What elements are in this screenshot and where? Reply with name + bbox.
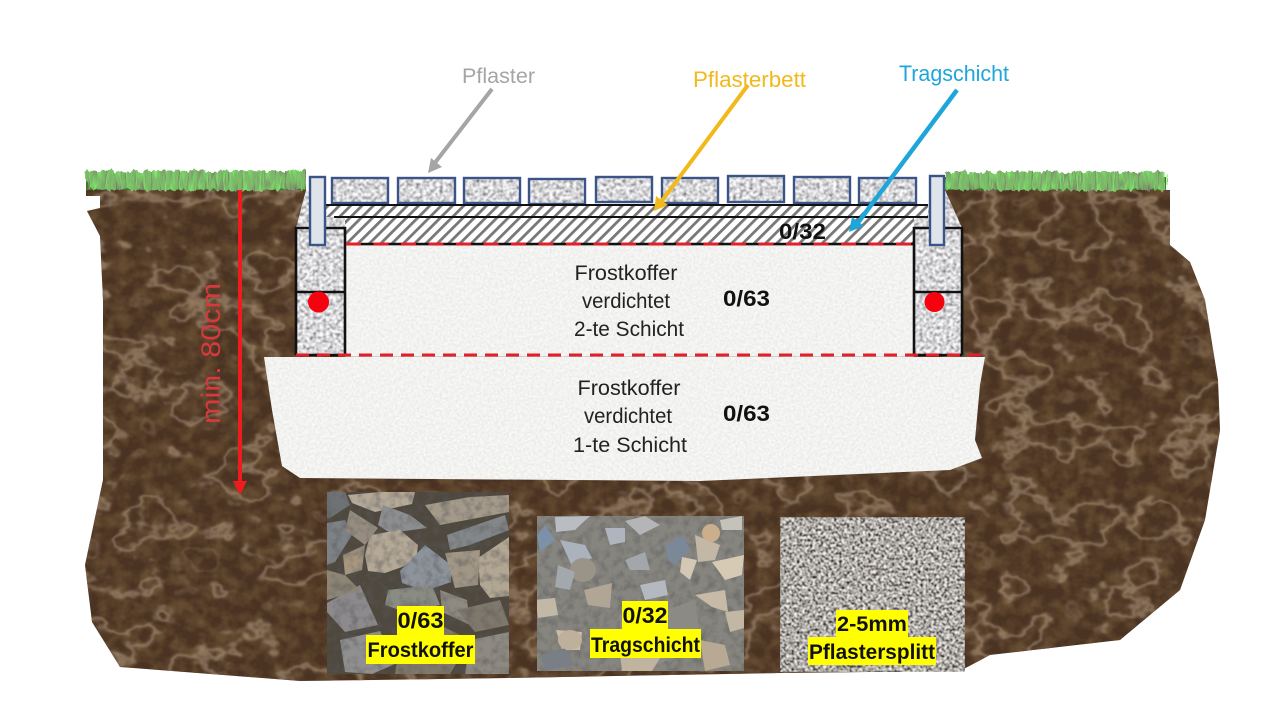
arrow Pflasterbett: [654, 85, 748, 211]
label 0/32: 0/32: [779, 219, 826, 244]
photo: Frostkoffer: [327, 492, 509, 674]
depth arrow: [233, 190, 247, 495]
right concrete haunch: [914, 228, 962, 355]
label 0/63 lower: 0/63: [723, 401, 770, 426]
depth label: min. 80cm: [196, 283, 226, 424]
text lower frost layer: verdichtet: [584, 405, 672, 428]
white area above trench: [306, 160, 945, 206]
gravel slope left: [296, 190, 345, 227]
yellow tag Pflastersplitt: Pflastersplitt: [809, 641, 935, 664]
base layer hatched: [345, 218, 914, 244]
label Pflaster: Pflaster: [462, 65, 535, 88]
photo: Pflastersplitt: [780, 517, 965, 672]
text lower frost layer: [573, 377, 687, 457]
dashed line lower: [296, 354, 985, 356]
red drain pipe left: [308, 292, 329, 312]
yellow tag 0/63: 0/63: [398, 608, 444, 633]
arrow Pflaster: [428, 89, 492, 173]
right curb stone: [930, 176, 944, 245]
text lower frost layer: 1-te Schicht: [573, 434, 687, 457]
left concrete haunch: [296, 228, 345, 355]
grass left: [86, 171, 306, 190]
left curb stone: [310, 177, 325, 245]
arrow Tragschicht: [849, 90, 957, 232]
infographic: paving cross-section: [84, 65, 1220, 681]
text upper frost layer: [574, 262, 684, 341]
text upper frost layer: Frostkoffer: [574, 262, 678, 285]
red drain pipe right: [924, 292, 944, 312]
yellow tag Frostkoffer: Frostkoffer: [368, 639, 474, 662]
dashed line upper: [345, 243, 914, 245]
photo: Tragschicht: [535, 516, 744, 671]
yellow tag Tragschicht: Tragschicht: [591, 634, 700, 657]
lower frost layer: [260, 355, 990, 485]
gravel slope right: [914, 190, 962, 227]
text upper frost layer: verdichtet: [582, 290, 670, 313]
pavers: [330, 174, 918, 204]
text upper frost layer: 2-te Schicht: [574, 318, 684, 341]
soil background: [80, 185, 1225, 685]
text lower frost layer: Frostkoffer: [578, 377, 680, 400]
label 0/63 upper: 0/63: [723, 286, 770, 311]
label Pflasterbett: Pflasterbett: [693, 67, 806, 92]
yellow tag 2-5mm: 2-5mm: [837, 613, 907, 636]
grass right: [945, 172, 1166, 190]
paving bed hatched: [326, 205, 928, 217]
label Tragschicht: Tragschicht: [899, 61, 1009, 86]
yellow tag 0/32: 0/32: [622, 603, 668, 628]
upper frost layer: [345, 245, 914, 357]
